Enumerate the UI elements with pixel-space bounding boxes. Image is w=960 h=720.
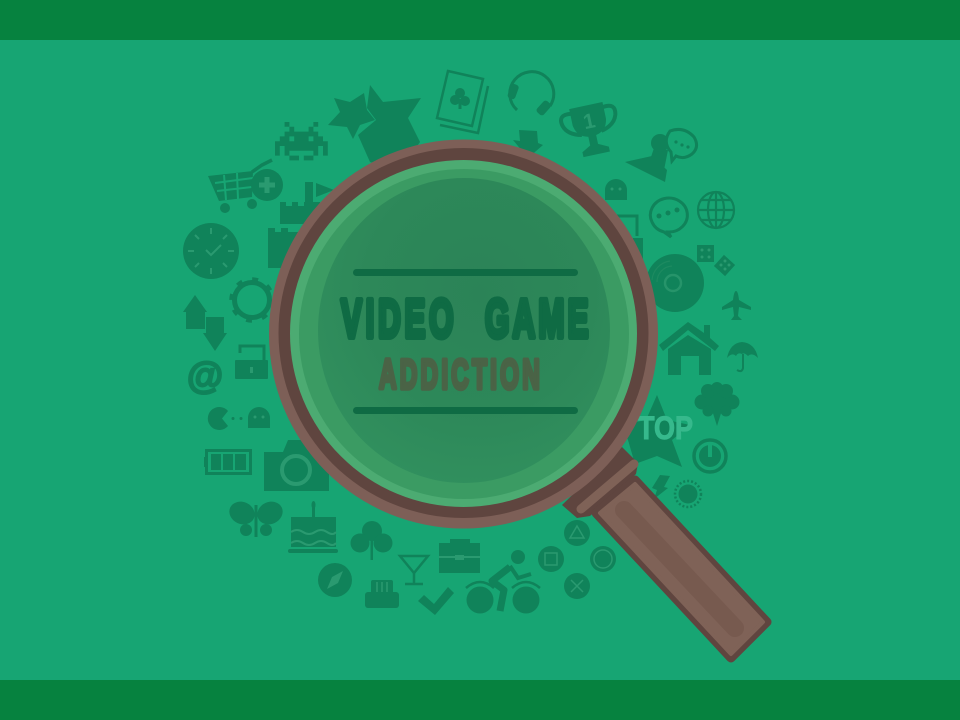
icon: gear	[231, 279, 273, 321]
title: video game	[341, 289, 592, 349]
icon: globe	[698, 192, 734, 228]
icon: compass	[318, 563, 352, 597]
icon: sun	[675, 481, 701, 507]
icon: lightning bolt	[652, 475, 670, 499]
icon: at sign: @	[187, 355, 223, 396]
icon: outlined box behind lens	[617, 216, 643, 260]
top band	[0, 0, 960, 40]
icon: big star	[358, 85, 421, 170]
icon: camera	[264, 440, 329, 491]
icon: typewriter	[365, 580, 399, 608]
lens glass	[318, 178, 610, 483]
icon: leafy tree	[694, 382, 740, 426]
icon: top star	[622, 395, 693, 467]
icon: birthday cake	[288, 501, 338, 553]
icon: house	[659, 322, 719, 375]
icon: small star	[328, 93, 375, 139]
icon: clock	[183, 223, 239, 279]
title: addiction: ADDICTION	[379, 352, 543, 398]
icon: playing cards	[437, 71, 488, 133]
icon: martini glass	[400, 556, 428, 584]
icon: trophy	[559, 100, 623, 160]
title: video game: GAME	[485, 289, 592, 349]
icon: briefcase	[439, 539, 480, 573]
icon: circle button	[590, 546, 616, 572]
lens rim inner	[278, 148, 648, 518]
icon: battery	[204, 450, 250, 474]
icon: shopping cart with plus	[208, 160, 283, 213]
lens mid ring	[299, 169, 629, 499]
magnifying glass	[269, 140, 767, 658]
title: video game: VIDEO	[341, 289, 457, 349]
icon cluster	[183, 71, 758, 615]
icon: headphones	[507, 72, 554, 117]
lens rim outer	[269, 140, 658, 528]
icon: square button	[538, 546, 564, 572]
icon: castle with flag	[268, 182, 334, 268]
icon: check mark	[418, 587, 454, 615]
icon: arrow behind lens	[513, 130, 543, 158]
icon: triangle button	[564, 520, 590, 546]
icon: pacman and ghost	[208, 407, 270, 430]
icon: trophy: 1	[581, 109, 598, 134]
icon: umbrella	[727, 342, 758, 371]
icon: airplane	[722, 291, 751, 320]
icon: up and down arrows	[183, 295, 227, 351]
icon: power button	[694, 440, 726, 472]
lower title rule	[353, 407, 578, 414]
icon: clover	[350, 521, 392, 560]
lens light ring	[290, 160, 637, 507]
icon: compact disc	[646, 254, 704, 312]
icon: speech bubble	[650, 198, 687, 237]
icon: ghost top right	[605, 179, 627, 200]
icon: joystick with speech bubble	[625, 129, 697, 182]
icon: dice	[697, 245, 735, 276]
icon: cyclist	[466, 550, 540, 614]
icon: space invader	[275, 122, 328, 160]
icon: cross button	[564, 573, 590, 599]
icon: top star: TOP	[638, 410, 693, 446]
bottom band	[0, 680, 960, 720]
icon: butterfly	[226, 498, 286, 537]
upper title rule	[353, 269, 578, 276]
handle	[562, 447, 767, 658]
icon: open padlock	[235, 346, 268, 379]
